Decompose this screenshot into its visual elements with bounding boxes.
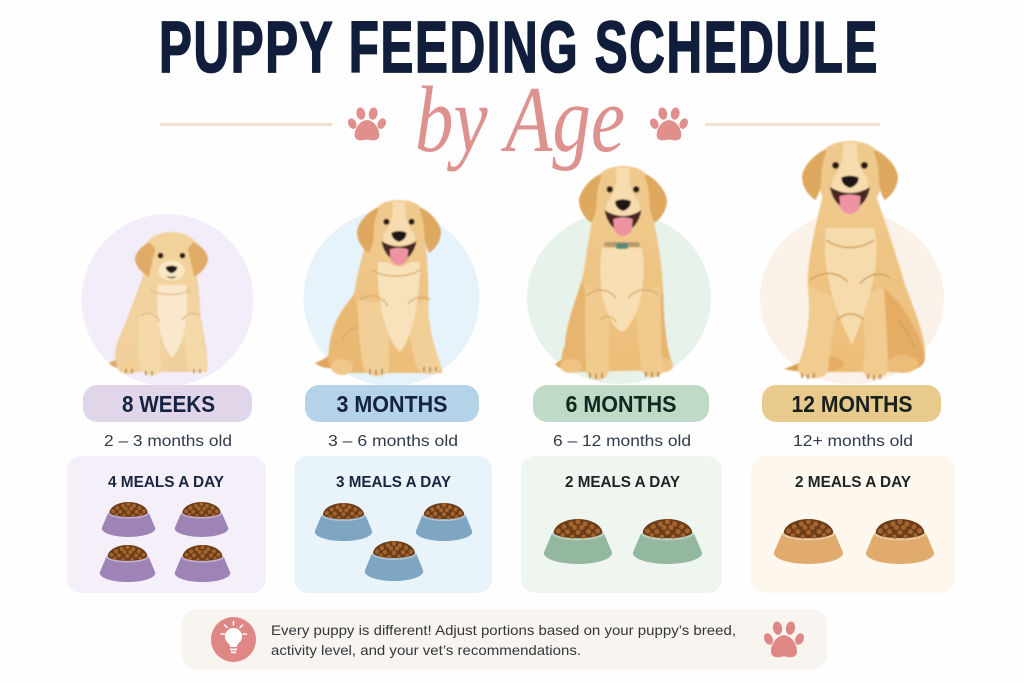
backdrop circle: [527, 212, 711, 384]
backdrop circle: [760, 212, 944, 384]
age label: 12 MONTHS: [792, 391, 912, 417]
callout: tip: [182, 609, 827, 670]
age label: 8 WEEKS: [122, 391, 215, 417]
puppy illustration: [109, 232, 208, 376]
dog illustration: [784, 141, 925, 380]
meals label: 3 MEALS A DAY: [336, 474, 451, 491]
age pill: [533, 385, 709, 422]
age pill: [305, 385, 479, 422]
age pill: [83, 385, 252, 422]
panel: 12 months: [751, 141, 955, 593]
age pill: [762, 385, 941, 422]
age label: 6 MONTHS: [566, 391, 676, 417]
age range: 6 – 12 months old: [553, 433, 691, 450]
tip text: [271, 622, 736, 658]
panel: 8 weeks: [67, 214, 266, 593]
meals label: 4 MEALS A DAY: [108, 474, 224, 491]
panel: 3 months: [294, 200, 492, 593]
puppy illustration: [315, 200, 442, 376]
meals label: 2 MEALS A DAY: [565, 474, 680, 491]
meals card: [294, 456, 492, 593]
age label: 3 MONTHS: [336, 391, 448, 417]
panel: 6 months: [521, 166, 722, 593]
bowls: [100, 502, 230, 582]
meals card: [751, 456, 955, 593]
meals card: [521, 456, 722, 593]
icon: paw: [762, 621, 806, 657]
backdrop circle: [304, 210, 480, 386]
meals card: [67, 456, 266, 593]
icon: left paw: [347, 107, 387, 140]
bowls: [544, 519, 702, 564]
backdrop circle: [82, 214, 254, 386]
age range: 2 – 3 months old: [104, 433, 232, 450]
age range: 3 – 6 months old: [328, 433, 458, 450]
bowls: [774, 519, 934, 564]
icon: light bulb: [211, 617, 256, 662]
subtitle: by Age: by Age: [415, 68, 625, 172]
age range: 12+ months old: [793, 433, 913, 450]
meals label: 2 MEALS A DAY: [795, 474, 911, 491]
tip text: Every puppy is different! Adjust portions based on your puppy’s breed,: [271, 622, 736, 638]
bowls: [315, 503, 472, 581]
dog illustration: [555, 166, 673, 380]
icon: right paw: [649, 107, 689, 140]
tip text: activity level, and your vet’s recommendations.: [271, 642, 581, 658]
